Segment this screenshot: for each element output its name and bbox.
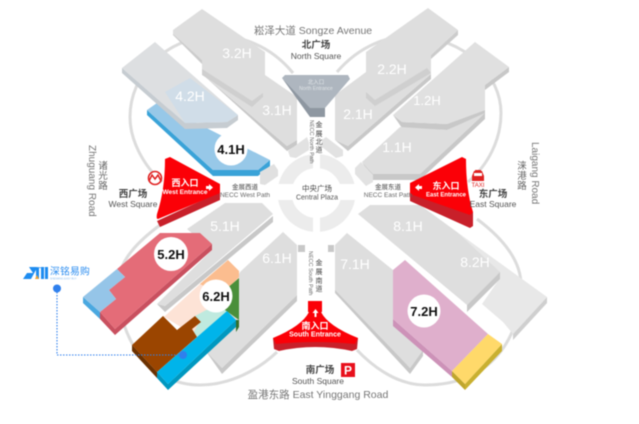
west labels: 光 [98, 170, 108, 182]
south entrance [273, 301, 358, 351]
hall 5.2H: 5.2H [157, 247, 185, 262]
west labels: 路 [98, 180, 108, 192]
path labels: 北 [316, 138, 322, 146]
hall 8.1H and 8.2H [358, 205, 547, 340]
path labels: NECC North Path [308, 120, 314, 163]
south labels: 盈港东路 East Yinggang Road [248, 388, 388, 401]
east labels: Laigang Road [529, 142, 540, 204]
south labels: 南广场 [306, 364, 335, 376]
west entrance [157, 157, 220, 227]
path labels: 金展东道 [375, 182, 402, 191]
icon: parking: P [344, 364, 352, 378]
south labels [248, 364, 388, 401]
hall 3.1H and 3.2H: 3.1H [262, 102, 292, 118]
path labels: 金 [316, 120, 322, 129]
hall 1.2H: 1.2H [413, 93, 441, 108]
hall 7.1H [328, 233, 423, 374]
path labels: NECC South Path [307, 251, 313, 295]
path labels: 展 [316, 130, 322, 138]
callout: dotted leader [53, 284, 187, 359]
hall 7.2H: 7.2H [410, 304, 438, 319]
hall 2.1H and 2.2H: 2.2H [377, 61, 407, 77]
perimeter ring road [118, 36, 521, 385]
hall 3.1H and 3.2H: 3.2H [222, 45, 252, 61]
icon: taxi: TAXI [472, 183, 485, 189]
hall 1.1H: 1.1H [382, 139, 412, 155]
north entrance [282, 75, 350, 117]
path labels: 金展西道 [232, 182, 258, 191]
hall 4.1H [147, 103, 278, 185]
label: 4.1H [214, 132, 248, 166]
hall 5.1H [157, 203, 273, 312]
hall 6.1H: 6.1H [262, 250, 292, 266]
west entrance: 西入口 [171, 178, 199, 188]
west entrance: West Entrance [162, 189, 208, 196]
hall 5.2H [83, 233, 212, 335]
east labels: 路 [517, 180, 527, 192]
icon: parking [341, 363, 355, 378]
icon: taxi [472, 170, 485, 189]
hall 3.1H and 3.2H [173, 9, 309, 158]
west labels [86, 145, 158, 217]
central plaza label [296, 183, 338, 202]
west labels: Zhuguang Road [86, 145, 97, 217]
west labels: 诸 [98, 161, 108, 172]
path labels: 展 [316, 268, 322, 276]
south labels: South Square [292, 376, 344, 386]
north road label: North Square [291, 51, 342, 61]
path labels: NECC West Path [220, 192, 270, 199]
east labels: 东广场 [479, 188, 508, 200]
hall 1.1H [355, 113, 485, 186]
west labels: West Square [109, 199, 158, 209]
hall 6.2H [132, 260, 239, 390]
logo: brand [23, 264, 90, 280]
hall 2.1H and 2.2H: 2.1H [343, 106, 373, 122]
hall 8.1H and 8.2H: 8.2H [460, 254, 490, 270]
hall 4.2H: 4.2H [175, 88, 205, 104]
logo: brand: 深铭易购 [50, 264, 90, 278]
path labels: 南 [316, 276, 322, 285]
central plaza label: Central Plaza [296, 194, 338, 202]
arrow: west entrance [206, 184, 213, 191]
path labels: 金 [316, 258, 322, 267]
path labels: 道 [316, 284, 322, 293]
east entrance [410, 157, 473, 228]
arrow: east entrance [415, 184, 422, 191]
south entrance: South Entrance [289, 332, 341, 338]
central plaza [270, 150, 364, 240]
north entrance: 北入口 [308, 78, 324, 86]
hall 1.2H [393, 42, 509, 130]
hall 4.2H [122, 42, 238, 129]
hall 7.1H: 7.1H [340, 256, 370, 272]
east entrance: 东入口 [432, 180, 460, 191]
east labels: East Square [470, 199, 517, 209]
east labels: 涞 [517, 161, 527, 172]
path labels [220, 120, 413, 295]
path labels: 道 [316, 145, 322, 154]
hall 2.1H and 2.2H [322, 8, 458, 158]
icon: metro [148, 172, 162, 184]
north road label [254, 24, 372, 61]
hall 5.1H: 5.1H [210, 218, 240, 234]
hall 8.1H and 8.2H: 8.1H [393, 218, 423, 234]
hall 6.2H: 6.2H [202, 289, 230, 304]
logo: brand: SHENMING EASY BUY [50, 278, 77, 280]
east entrance: East Entrance [426, 192, 467, 198]
east labels: 港 [517, 170, 527, 182]
hall 6.1H [205, 232, 305, 374]
north entrance: North Entrance [299, 86, 333, 92]
path labels: NECC East Path [364, 192, 413, 199]
label: 4.1H: 4.1H [217, 142, 245, 157]
central plaza label: 中央广场 [302, 183, 332, 193]
north road label: 崧泽大道 Songze Avenue [254, 24, 372, 37]
west labels: 西广场 [119, 188, 148, 200]
south entrance: 南入口 [301, 321, 329, 331]
north road label: 北广场 [302, 39, 331, 51]
hall 7.2H [393, 260, 502, 390]
east labels [470, 142, 540, 209]
arrow: south entrance [312, 309, 318, 317]
